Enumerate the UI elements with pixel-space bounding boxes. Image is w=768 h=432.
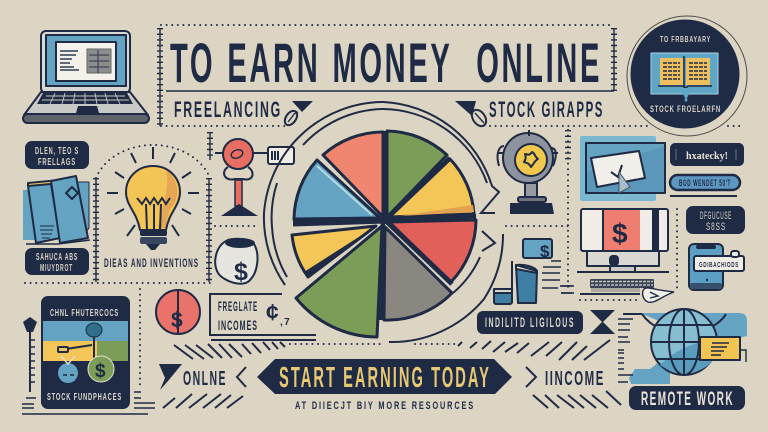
panel: stock funds chart: CHNL FHUTERCOCS bbox=[50, 307, 119, 319]
icon: cash card: $ bbox=[540, 242, 552, 261]
icon: dollar coin: $ bbox=[171, 309, 186, 332]
label box: bottom left: SAHUCA ABS bbox=[36, 252, 78, 263]
large green slice bbox=[296, 226, 382, 337]
short lines beside globe bbox=[618, 314, 633, 382]
pie chart with arcs bbox=[264, 102, 503, 342]
dotted layout frames bbox=[25, 25, 744, 385]
label box: bottom left bbox=[25, 248, 89, 275]
hatch marks: right bottom bbox=[533, 391, 621, 408]
icon: light bulb bbox=[107, 147, 199, 250]
hatch marks: right top bbox=[415, 340, 610, 360]
text box: freelance incomes: ,7 bbox=[280, 317, 291, 328]
caption: more resources: AT DIIECJT BIY MORE RESOURCES bbox=[295, 400, 475, 412]
label pill: blue bbox=[670, 175, 740, 196]
panel: stock funds chart bbox=[41, 296, 130, 409]
icon: desktop monitor: $ bbox=[612, 218, 628, 249]
label box: top left: DLEN, TEO S bbox=[35, 146, 79, 157]
icon: money bag bbox=[215, 238, 257, 286]
icon: cash card bbox=[523, 239, 552, 261]
red slice bbox=[389, 220, 476, 282]
icon: books bbox=[23, 176, 90, 244]
hatch marks: left top bbox=[174, 342, 384, 359]
label: income bbox=[526, 367, 605, 390]
label: online: ONLNE bbox=[183, 368, 227, 390]
icon: phone with tag bbox=[689, 244, 744, 290]
icon: laptop bbox=[23, 31, 149, 123]
heading: stock graphs: STOCK GIRAPPS bbox=[489, 97, 604, 122]
label box: remote work bbox=[629, 386, 745, 410]
text box: freelance incomes: ¢ bbox=[266, 299, 282, 325]
icon: desktop monitor bbox=[577, 209, 669, 294]
banner: start earning today: START EARNING TODAY bbox=[279, 362, 491, 394]
label box: individual listings: INDILITD LIGILOUS bbox=[485, 314, 575, 330]
label box: bottom left: MIUYDROT bbox=[40, 263, 73, 274]
text box: freelance incomes: INCOMES bbox=[218, 317, 258, 333]
text box: freelance incomes: FREGLATE bbox=[218, 298, 258, 314]
label box: individual listings bbox=[477, 311, 583, 334]
small yellow slice bbox=[292, 226, 376, 277]
banner: start earning today bbox=[257, 359, 512, 394]
panel: stock funds chart: $ bbox=[95, 361, 108, 382]
label box: dark badge: hxatecky! bbox=[686, 151, 728, 162]
label box: right bbox=[686, 206, 745, 234]
badge: circular book bbox=[627, 16, 747, 136]
text box: freelance incomes bbox=[210, 294, 316, 340]
label box: top left: FRELLAGS bbox=[38, 157, 76, 168]
icon: paper plane bbox=[561, 286, 674, 302]
label box: dark badge bbox=[670, 143, 744, 166]
blue slice bbox=[294, 160, 380, 219]
badge: circular book: TO FRBBAYARY bbox=[660, 35, 711, 44]
hatch marks: left bottom bbox=[163, 394, 243, 408]
icon: cups bbox=[494, 261, 572, 304]
salmon slice bbox=[323, 132, 383, 217]
icon: dollar coin bbox=[156, 290, 200, 334]
arcs around pie bbox=[264, 102, 499, 285]
label box: top left bbox=[25, 141, 89, 169]
icon: pen nib left bbox=[282, 101, 313, 127]
label: online bbox=[159, 364, 246, 390]
panel: stock funds chart: STOCK FUNDPHACES bbox=[47, 391, 122, 403]
yellow slice bbox=[389, 159, 474, 217]
icon: pin stand with tag bbox=[215, 139, 294, 216]
icon: globe with note bbox=[623, 309, 747, 384]
heading: freelancing: FREELANCING bbox=[174, 97, 282, 122]
label: income: IINCOME bbox=[545, 368, 605, 390]
caption: ideas and inventions: DIEAS AND INVENTIONS bbox=[104, 256, 199, 270]
icon: trophy gear bbox=[497, 130, 558, 214]
badge: circular book: STOCK FROELARFN bbox=[650, 104, 721, 114]
label box: right: S8SS bbox=[706, 221, 726, 233]
icon: thermometer bbox=[23, 317, 37, 392]
panel: blue window with cursor bbox=[580, 136, 665, 201]
green slice bbox=[387, 131, 447, 217]
icon: phone with tag: GDIBACHIODS bbox=[699, 262, 739, 269]
icon: hourglass bbox=[590, 310, 615, 334]
short rule lines bbox=[22, 392, 155, 414]
icon: money bag: $ bbox=[234, 258, 251, 286]
spokes bbox=[293, 220, 385, 223]
grey slice bbox=[384, 227, 452, 320]
icon: pen nib right bbox=[455, 101, 489, 129]
